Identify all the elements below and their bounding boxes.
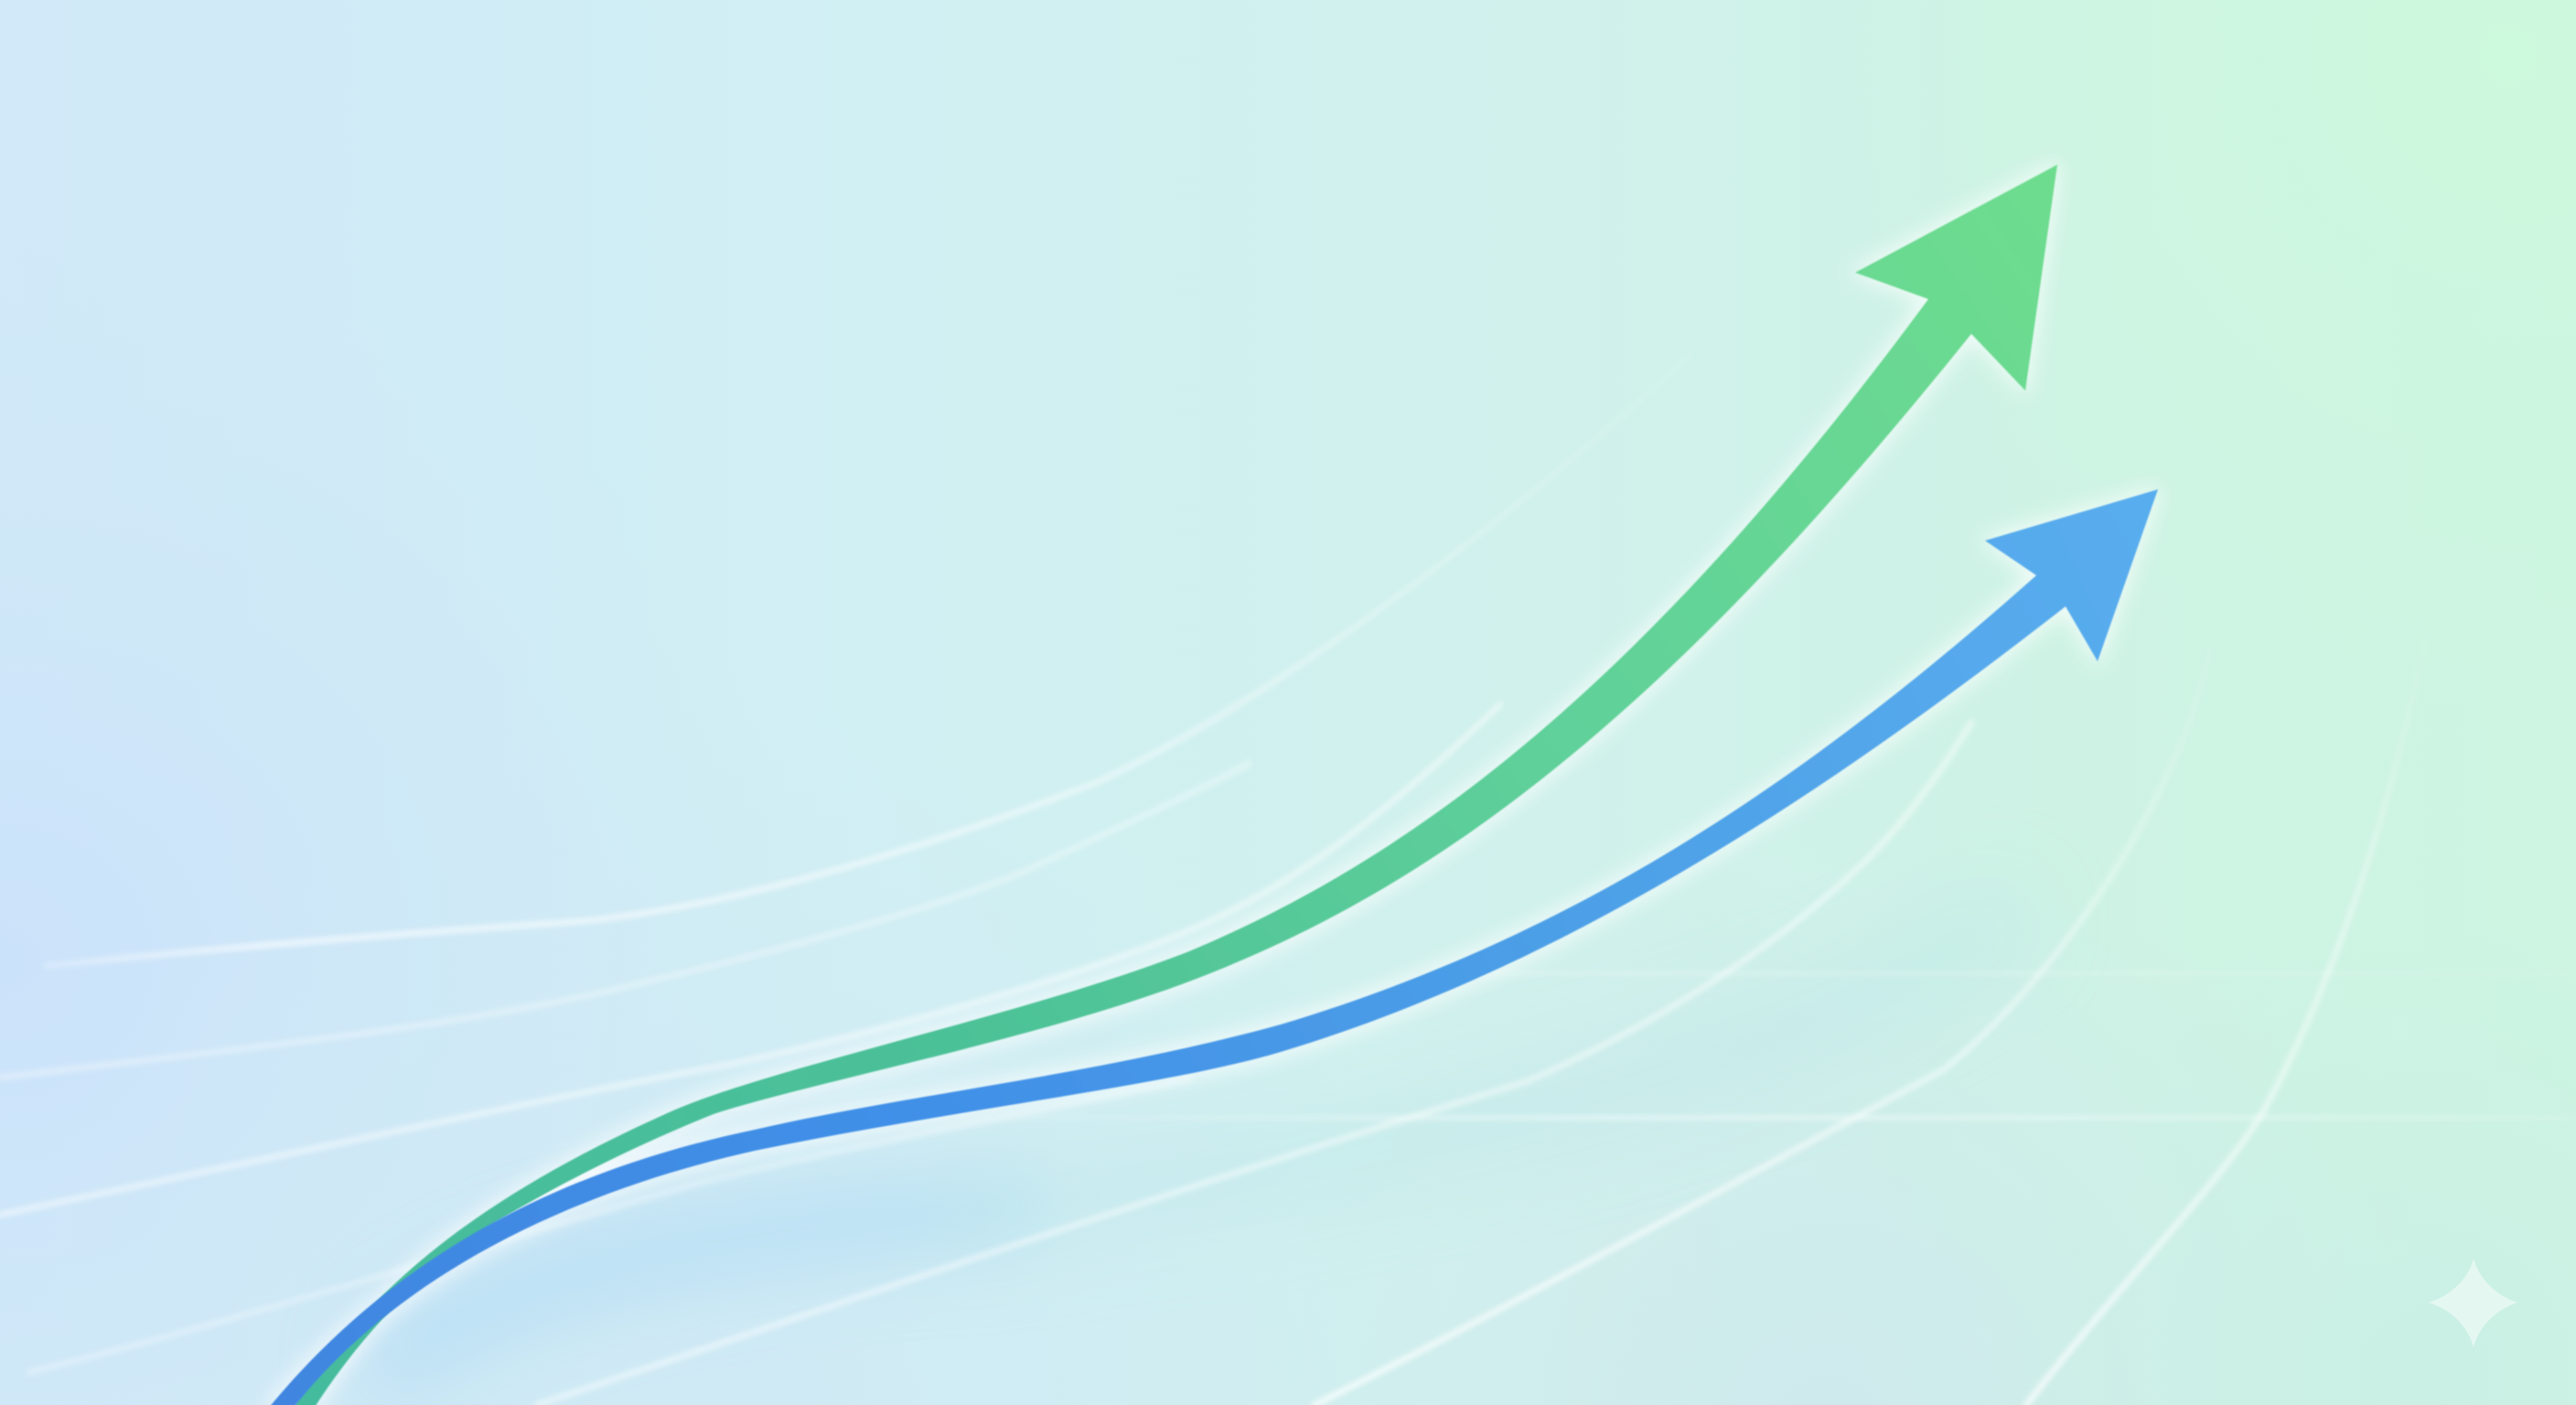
icon: four-point sparkle bbox=[2429, 1259, 2517, 1347]
arrow: blue upward trend bbox=[268, 489, 2158, 1405]
arrow: green upward trend bbox=[293, 165, 2057, 1405]
white glow around arrows bbox=[268, 165, 2158, 1405]
soft blue shadow beneath the arrows bbox=[393, 924, 1994, 1363]
faint white background curves bbox=[0, 353, 2576, 1405]
